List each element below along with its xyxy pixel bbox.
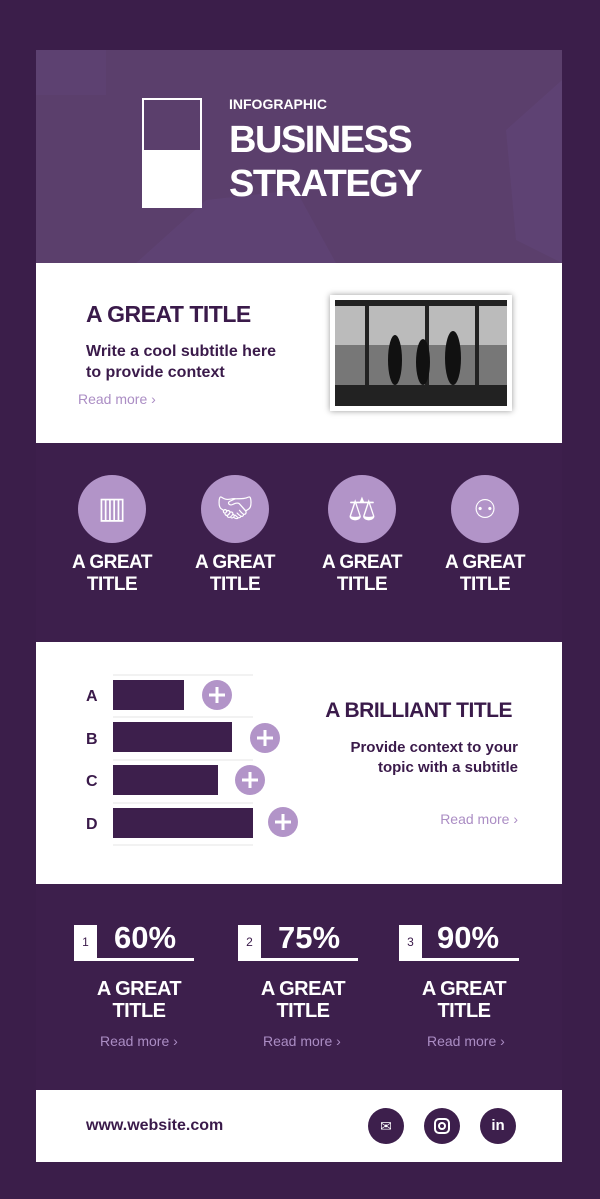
icon item 4: ⚇ xyxy=(473,494,497,524)
panel: stats: 75% xyxy=(278,920,340,955)
panel: stats: Read more › xyxy=(263,1033,341,1049)
bar chart: A xyxy=(86,688,98,705)
bar chart: D xyxy=(86,816,98,833)
icon item 2: TITLE xyxy=(210,574,260,595)
icon: instagram xyxy=(424,1108,460,1144)
bar chart: B xyxy=(86,731,98,748)
icon item 1 xyxy=(72,475,152,595)
icon item 4 xyxy=(445,475,526,595)
panel: stats: TITLE xyxy=(276,1000,330,1022)
icon item 3: A GREAT xyxy=(322,552,402,573)
panel: stats: TITLE xyxy=(437,1000,491,1022)
stat 2 xyxy=(238,920,358,1049)
panel: stats: A GREAT xyxy=(422,978,506,1000)
bar chart: C xyxy=(86,773,98,790)
stat 1 xyxy=(74,920,194,1049)
title: INFOGRAPHIC xyxy=(229,96,327,112)
footer xyxy=(36,1090,562,1162)
read more: Read more › xyxy=(440,811,518,827)
icon: linkedin xyxy=(480,1108,516,1144)
icon item 3 xyxy=(322,475,402,595)
chart subtitle: Provide context to your xyxy=(350,739,518,756)
panel: intro xyxy=(36,263,562,443)
panel: stats: 2 xyxy=(246,935,253,949)
icon item 2: A GREAT xyxy=(195,552,275,573)
heading: A GREAT TITLE xyxy=(86,301,251,327)
title: BUSINESS xyxy=(229,119,411,161)
subtitle xyxy=(86,343,276,381)
panel: stats: Read more › xyxy=(427,1033,505,1049)
icon item 1: ▥ xyxy=(98,492,126,525)
icon: linkedin: in xyxy=(491,1117,505,1134)
subtitle: Write a cool subtitle here xyxy=(86,343,276,360)
panel: stats: 3 xyxy=(407,935,414,949)
panel: stats: 60% xyxy=(114,920,176,955)
panel: stats: A GREAT xyxy=(261,978,345,1000)
panel: stats: A GREAT xyxy=(97,978,181,1000)
icon item 1: TITLE xyxy=(87,574,137,595)
icon item 1: A GREAT xyxy=(72,552,152,573)
panel: stats: 1 xyxy=(82,935,89,949)
icon item 2: 🤝︎ xyxy=(216,492,254,525)
photo xyxy=(330,295,512,411)
title: STRATEGY xyxy=(229,163,421,205)
panel: icons xyxy=(36,443,562,642)
icon item 4: A GREAT xyxy=(445,552,525,573)
decorative building shapes xyxy=(36,50,562,263)
icon item 2 xyxy=(195,475,276,595)
read more: Read more › xyxy=(78,391,156,407)
panel: stats: 90% xyxy=(437,920,499,955)
subtitle: to provide context xyxy=(86,364,225,381)
stat 3 xyxy=(399,920,519,1049)
icon item 3: ⚖ xyxy=(348,491,376,527)
panel: stats: TITLE xyxy=(112,1000,166,1022)
title xyxy=(229,96,422,205)
chart subtitle: topic with a subtitle xyxy=(378,759,518,776)
icon item 3: TITLE xyxy=(337,574,387,595)
panel: stats xyxy=(36,884,562,1090)
icon: email: ✉ xyxy=(380,1118,392,1134)
icon: email xyxy=(368,1108,404,1144)
icon item 4: TITLE xyxy=(460,574,510,595)
bar chart xyxy=(86,674,298,846)
logo block xyxy=(142,98,202,208)
panel: stats: Read more › xyxy=(100,1033,178,1049)
chart heading: A BRILLIANT TITLE xyxy=(325,699,512,722)
website: www.website.com xyxy=(86,1117,223,1134)
panel: chart xyxy=(36,642,562,884)
header panel xyxy=(36,50,562,263)
chart subtitle xyxy=(350,739,518,776)
